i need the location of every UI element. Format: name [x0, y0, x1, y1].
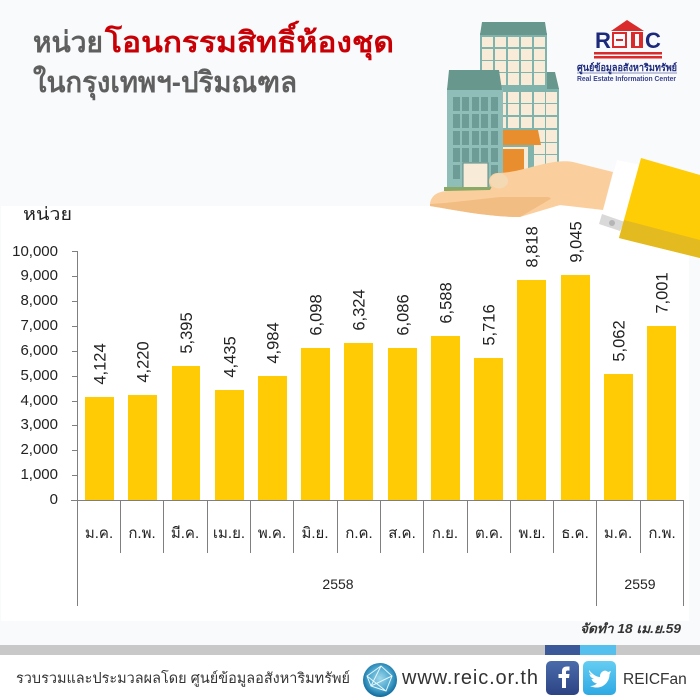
date note: จัดทำ 18 เม.ย.59 — [580, 621, 682, 636]
y axis labels — [12, 243, 58, 508]
y axis labels: 7,000 — [20, 317, 58, 334]
axis title: หน่วย — [23, 204, 72, 224]
month labels: ม.ค. — [85, 525, 113, 542]
value labels — [92, 221, 672, 385]
axes — [71, 252, 684, 606]
value labels: 6,098 — [308, 294, 326, 336]
y axis labels: 5,000 — [20, 367, 58, 384]
month labels: ก.พ. — [648, 525, 676, 542]
year labels — [322, 576, 656, 592]
bars — [85, 275, 676, 500]
y axis labels: 8,000 — [20, 292, 58, 309]
y axis labels: 9,000 — [20, 267, 58, 284]
logo: REIC: Real Estate Information Center — [577, 74, 676, 83]
month labels: ส.ค. — [388, 525, 416, 542]
month labels: มี.ค. — [171, 525, 199, 542]
value labels: 7,001 — [654, 272, 672, 314]
month labels — [85, 525, 676, 542]
y axis labels: 6,000 — [20, 342, 58, 359]
value labels: 6,324 — [350, 289, 368, 331]
value labels: 4,220 — [134, 341, 152, 383]
month labels: พ.ค. — [258, 525, 286, 542]
month labels: ก.พ. — [128, 525, 156, 542]
value labels: 4,124 — [92, 343, 110, 385]
y axis labels: 1,000 — [20, 466, 58, 483]
y axis labels: 0 — [50, 491, 58, 508]
facebook name: REICFan — [623, 671, 687, 688]
logo: REIC: R — [595, 28, 611, 53]
logo: REIC: C — [645, 28, 661, 53]
title: ในกรุงเทพฯ-ปริมณฑล — [33, 65, 297, 100]
value labels: 9,045 — [568, 221, 586, 263]
title — [33, 20, 394, 100]
value labels: 6,086 — [394, 294, 412, 336]
panel: chart background — [1, 206, 689, 621]
month labels: ม.ค. — [604, 525, 632, 542]
y axis labels: 10,000 — [12, 243, 58, 260]
icon: globe — [363, 663, 397, 697]
bar chart — [12, 221, 684, 606]
icon: facebook — [546, 661, 579, 695]
icon: hand holding buildings — [430, 158, 700, 258]
title: โอนกรรมสิทธิ์ห้องชุด — [104, 20, 394, 60]
y axis labels: 3,000 — [20, 416, 58, 433]
value labels: 4,435 — [222, 336, 240, 378]
month labels: ก.ย. — [432, 525, 458, 542]
month labels: ต.ค. — [475, 525, 503, 542]
value labels: 5,716 — [480, 304, 498, 346]
month labels: ก.ค. — [345, 525, 373, 542]
icon: twitter — [583, 661, 616, 695]
logo: REIC: ศูนย์ข้อมูลอสังหาริมทรัพย์ — [577, 62, 677, 75]
year labels: 2558 — [322, 576, 354, 592]
value labels: 8,818 — [524, 226, 542, 268]
month labels: มิ.ย. — [301, 525, 329, 542]
value labels: 4,984 — [264, 322, 282, 364]
value labels: 5,395 — [178, 312, 196, 354]
website: www.reic.or.th — [401, 667, 538, 689]
value labels: 6,588 — [438, 282, 456, 324]
year labels: 2559 — [624, 576, 656, 592]
y axis labels: 2,000 — [20, 441, 58, 458]
month labels: พ.ย. — [518, 525, 546, 542]
value labels: 5,062 — [610, 320, 628, 362]
month labels: ธ.ค. — [561, 525, 589, 542]
month labels: เม.ย. — [213, 525, 245, 542]
icon: buildings — [444, 22, 559, 191]
logo: REIC — [577, 20, 677, 83]
y axis labels: 4,000 — [20, 392, 58, 409]
title: หน่วย — [33, 27, 103, 59]
footer — [0, 645, 700, 700]
footer credit: รวบรวมและประมวลผลโดย ศูนย์ข้อมูลอสังหาริมทรัพย์ — [16, 669, 350, 687]
